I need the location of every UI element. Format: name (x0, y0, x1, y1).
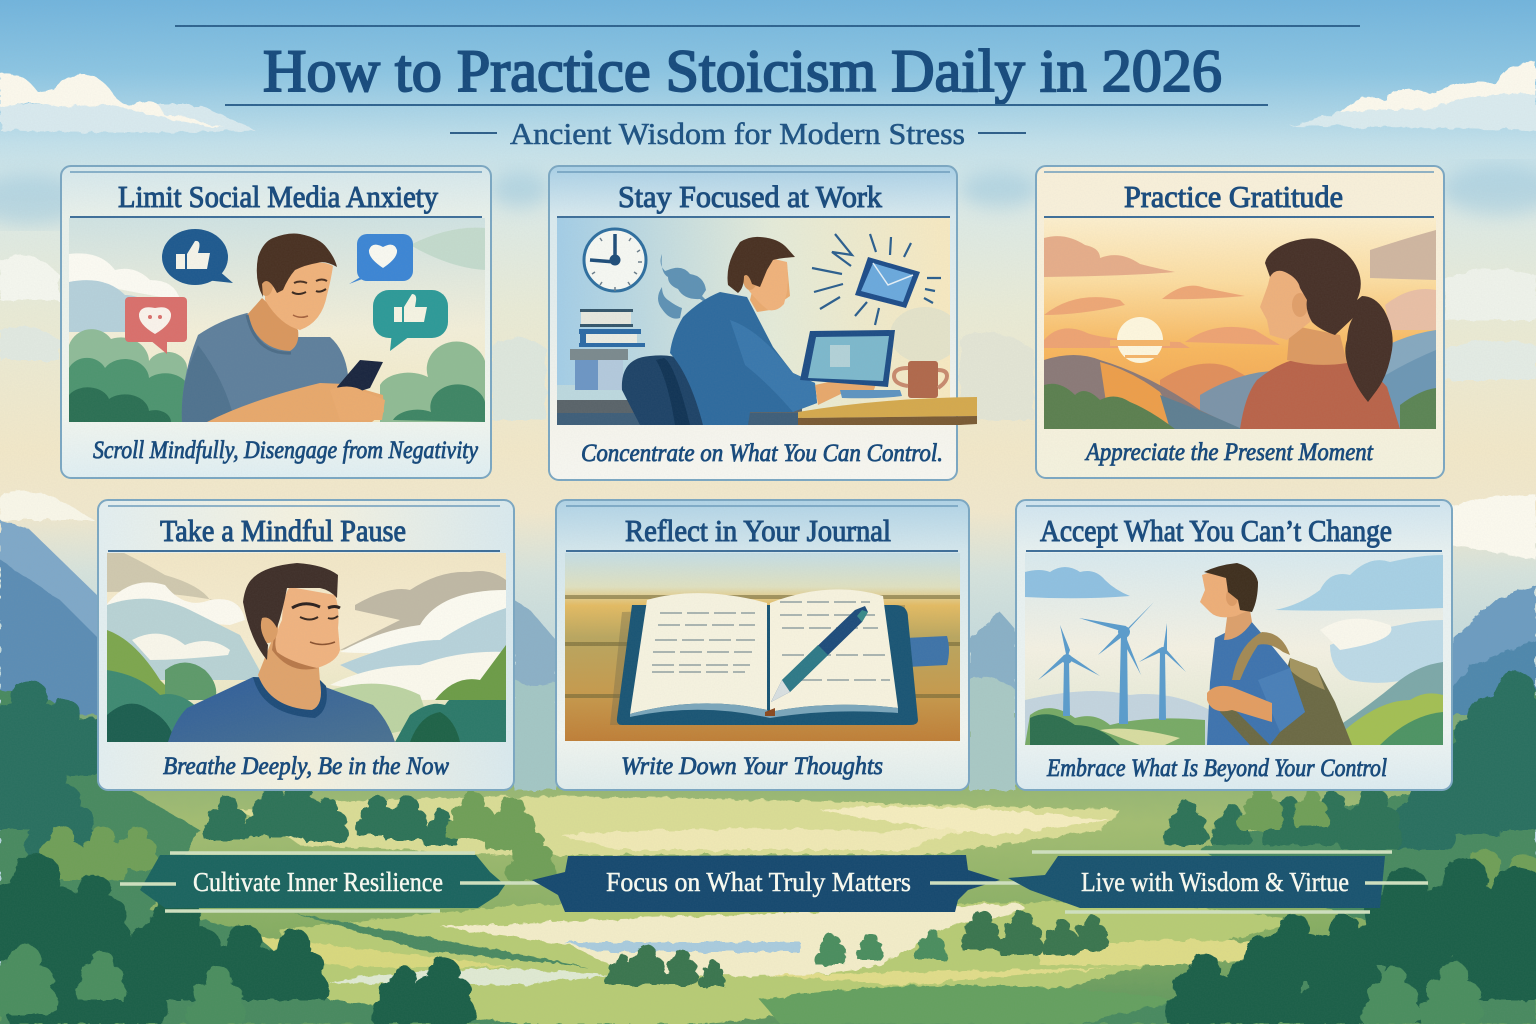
icon: red heart bubble (125, 297, 187, 354)
icon: thumbs-up bubble (162, 229, 233, 285)
icon: mug (894, 361, 947, 398)
icon: teal thumbs-up bubble (373, 290, 448, 351)
title rule bottom (225, 104, 1268, 106)
panel: Limit Social Media Anxiety (61, 166, 491, 478)
caption: Scroll Mindfully, Disengage from Negativity (93, 437, 479, 464)
panel: Stay Focused at Work (549, 166, 977, 480)
caption: Breathe Deeply, Be in the Now (163, 753, 449, 780)
illustration: man at laptop (557, 218, 977, 425)
icon: wind turbines (1038, 602, 1186, 724)
heading: Practice Gratitude (1124, 179, 1343, 214)
panel: Take a Mindful Pause (98, 500, 514, 790)
illustration: man watching wind turbines (1025, 553, 1443, 745)
banner: Focus on What Truly Matters (532, 855, 1065, 912)
title rule top (175, 25, 1360, 27)
heading: Accept What You Can’t Change (1040, 513, 1392, 548)
banner: Cultivate Inner Resilience: Cultivate Inner Resilience (193, 867, 443, 897)
illustration: man with phone (69, 218, 485, 422)
illustration: man breathing (107, 545, 506, 742)
heading: Limit Social Media Anxiety (118, 179, 438, 214)
icon: email alert (812, 234, 941, 325)
banner: Cultivate Inner Resilience (120, 853, 590, 911)
title: How to Practice Stoicism Daily in 2026 (263, 38, 1222, 104)
banner: Live with Wisdom & Virtue (1008, 852, 1428, 912)
icon: clock (584, 229, 646, 291)
heading: Reflect in Your Journal (625, 513, 891, 548)
caption: Embrace What Is Beyond Your Control (1046, 755, 1387, 782)
heading: Take a Mindful Pause (160, 513, 406, 548)
panel: Practice Gratitude (1036, 166, 1444, 478)
illustration: woman watching sunrise (1044, 218, 1436, 429)
panel: Accept What You Can't Change (1016, 500, 1452, 790)
banner: Focus on What Truly Matters: Focus on What Truly Matters (606, 867, 911, 897)
fields (240, 797, 1120, 855)
heading: Stay Focused at Work (618, 179, 882, 214)
illustration: open journal and pen (565, 553, 960, 741)
subtitle: Ancient Wisdom for Modern Stress (510, 116, 965, 151)
banner: Live with Wisdom & Virtue: Live with Wisdom & Virtue (1081, 867, 1349, 897)
forests (0, 690, 520, 1024)
caption: Appreciate the Present Moment (1084, 439, 1374, 466)
icon: heart bubble (349, 234, 413, 284)
caption: Concentrate on What You Can Control. (581, 440, 943, 467)
panel: Reflect in Your Journal (556, 500, 969, 790)
caption: Write Down Your Thoughts (621, 753, 883, 780)
